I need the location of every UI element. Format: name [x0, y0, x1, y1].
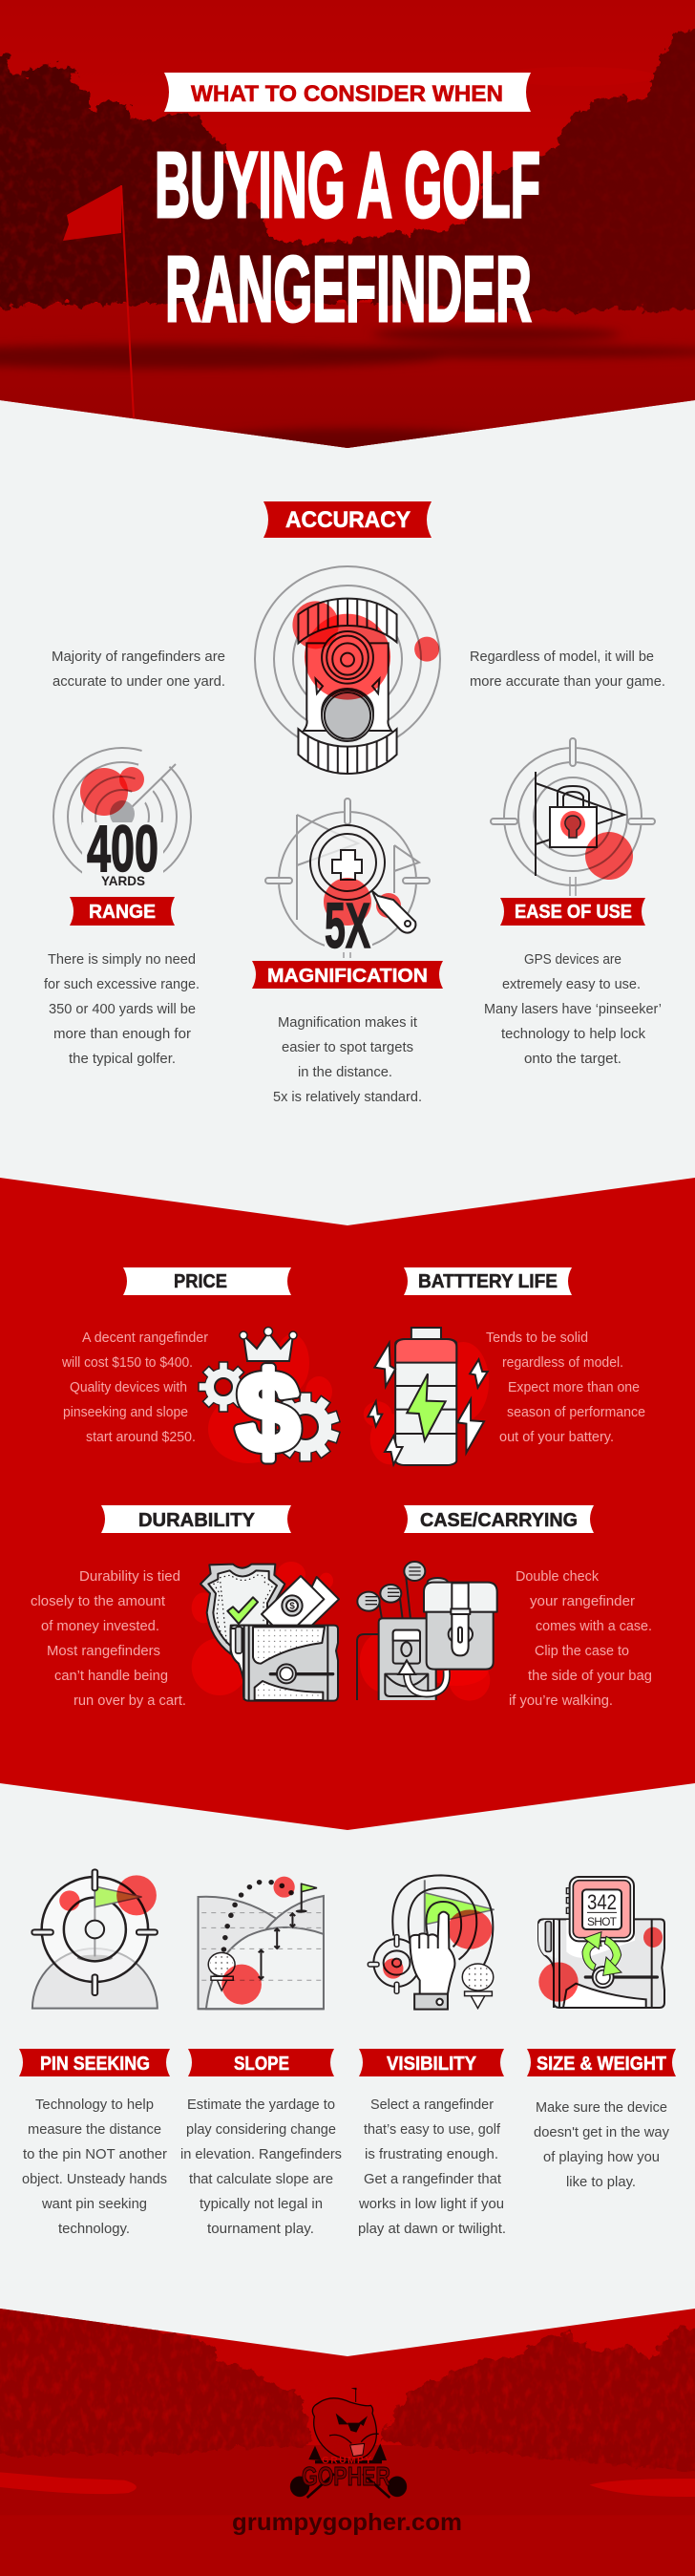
slope heading: SLOPE [234, 2054, 289, 2075]
text: range: for such excessive range. [44, 977, 200, 992]
screen readout: 342 shot [587, 1890, 618, 1928]
icon: durability shield, money, rangefinder [192, 1562, 339, 1701]
ease of use heading [500, 898, 645, 926]
icon: range 400 yards [53, 745, 191, 889]
size and weight heading: SIZE & WEIGHT [537, 2054, 666, 2075]
logo: grumpy gopher: GOPHER [302, 2461, 390, 2491]
text: slope: in elevation. Rangefinders [180, 2147, 342, 2162]
text: battery life [486, 1331, 645, 1445]
magnification heading: MAGNIFICATION [267, 966, 428, 987]
text: ease of use: extremely easy to use. [502, 977, 641, 992]
text: price: will cost $150 to $400. [61, 1355, 193, 1371]
text: battery life: out of your battery. [499, 1430, 614, 1445]
text: visibility [358, 2097, 506, 2237]
text: visibility: play at dawn or twilight. [358, 2222, 506, 2237]
text: accuracy right [470, 649, 665, 690]
text: case/carrying: your rangefinder [530, 1594, 635, 1609]
icon: battery with lightning bolts [364, 1328, 489, 1465]
icon: magnification 5x [265, 798, 430, 962]
case/carrying heading: CASE/CARRYING [420, 1510, 578, 1531]
text: size and weight: like to play. [566, 2175, 636, 2190]
text: magnification: Magnification makes it [278, 1015, 417, 1031]
text: visibility: is frustrating enough. [365, 2147, 498, 2162]
text: range: 350 or 400 yards will be [49, 1002, 196, 1017]
text: magnification: 5x is relatively standard. [273, 1090, 422, 1105]
screen readout: 342 shot: SHOT [587, 1915, 618, 1928]
text: battery life: season of performance [507, 1405, 645, 1420]
text: pin seeking: technology. [58, 2222, 130, 2237]
text: case/carrying [509, 1569, 652, 1709]
logo: grumpy gopher: GRUMPY [322, 2456, 371, 2466]
text: case/carrying: the side of your bag [528, 1669, 652, 1684]
text: size and weight: of playing how you [543, 2150, 660, 2165]
icon: ease of use lock and target [491, 738, 655, 896]
size and weight heading [527, 2049, 676, 2076]
icon: price dollar with crown and gears: $ [237, 1350, 300, 1476]
text: slope: typically not legal in [200, 2197, 323, 2212]
text: ease of use [484, 952, 662, 1067]
text: accuracy right: more accurate than your game. [470, 674, 665, 690]
text: case/carrying: if you’re walking. [509, 1693, 613, 1709]
visibility heading [359, 2049, 504, 2076]
slope heading [188, 2049, 334, 2076]
text: case/carrying: Clip the case to [535, 1644, 629, 1659]
text: durability: closely to the amount [31, 1594, 165, 1609]
icon: range 400 yards: 400 [87, 812, 158, 885]
text: visibility: Get a rangefinder that [364, 2172, 501, 2187]
magnification heading [252, 961, 443, 989]
text: pin seeking: object. Unsteady hands [22, 2172, 167, 2187]
hero subtitle ribbon: WHAT TO CONSIDER WHEN [191, 81, 503, 107]
durability heading [101, 1505, 291, 1533]
text: price: start around $250. [86, 1430, 196, 1445]
hero: golf course photo panel [0, 0, 695, 461]
durability heading: DURABILITY [138, 1510, 256, 1531]
text: ease of use: onto the target. [524, 1052, 621, 1067]
text: slope: tournament play. [207, 2222, 314, 2237]
pin seeking heading: PIN SEEKING [40, 2054, 150, 2075]
text: ease of use: GPS devices are [524, 952, 621, 968]
ease of use heading: EASE OF USE [515, 902, 632, 923]
text: range [44, 952, 200, 1067]
text: durability: of money invested. [41, 1619, 159, 1634]
screen readout: 342 shot: 342 [587, 1890, 617, 1914]
range heading [70, 897, 175, 926]
text: price: Quality devices with [70, 1380, 187, 1395]
text: durability: Durability is tied [79, 1569, 180, 1585]
section: accuracy heading [263, 501, 432, 538]
text: magnification [273, 1015, 422, 1105]
text: accuracy left [52, 649, 225, 690]
text: range: There is simply no need [48, 952, 196, 968]
icon: magnification 5x: 5X [325, 890, 370, 962]
text: durability [31, 1569, 186, 1709]
text: pin seeking: want pin seeking [41, 2197, 147, 2212]
case/carrying heading [404, 1505, 594, 1533]
logo: grumpy gopher [290, 2388, 407, 2498]
icon: case and carrying bag [357, 1562, 497, 1701]
text: pin seeking [22, 2097, 167, 2237]
text: price [61, 1331, 208, 1445]
text: size and weight: doesn't get in the way [534, 2125, 670, 2140]
text: pin seeking: to the pin NOT another [23, 2147, 167, 2162]
text: pin seeking: measure the distance [28, 2122, 161, 2138]
text: slope [180, 2097, 342, 2237]
icon: pin seeking [32, 1869, 158, 2009]
text: slope: play considering change [186, 2122, 336, 2138]
icon: durability shield, money, rangefinder: $ [289, 1601, 295, 1611]
text: magnification: easier to spot targets [282, 1040, 413, 1055]
text: range: more than enough for [53, 1027, 191, 1042]
visibility heading: VISIBILITY [387, 2054, 477, 2075]
icon: slope [199, 1877, 324, 2009]
footer website: grumpygopher.com [232, 2509, 462, 2536]
main title [155, 133, 540, 341]
text: price: pinseeking and slope [63, 1405, 188, 1420]
text: visibility: Select a rangefinder [370, 2097, 494, 2113]
pin seeking heading [19, 2049, 170, 2076]
text: pin seeking: Technology to help [35, 2097, 154, 2113]
text: case/carrying: Double check [516, 1569, 600, 1585]
text: durability: can’t handle being [54, 1669, 168, 1684]
hero subtitle ribbon [164, 73, 531, 112]
text: case/carrying: comes with a case. [536, 1619, 652, 1634]
text: accuracy left: accurate to under one yard. [53, 674, 225, 690]
battery life heading [404, 1267, 572, 1295]
red flag [63, 185, 135, 417]
battery life heading: BATTTERY LIFE [418, 1271, 558, 1292]
text: range: the typical golfer. [69, 1052, 176, 1067]
icon: size and weight [538, 1877, 664, 2008]
price heading: PRICE [174, 1271, 227, 1292]
text: battery life: Expect more than one [508, 1380, 640, 1395]
range heading: RANGE [89, 902, 156, 923]
text: price: A decent rangefinder [82, 1331, 208, 1346]
icon: range 400 yards: YARDS [101, 873, 145, 888]
text: slope: that calculate slope are [189, 2172, 333, 2187]
icon: price dollar with crown and gears [199, 1328, 340, 1476]
icon: price dollar with crown and gears: $ [237, 1350, 300, 1476]
text: accuracy right: Regardless of model, it will be [470, 649, 654, 665]
text: accuracy left: Majority of rangefinders are [52, 649, 225, 665]
text: size and weight [534, 2100, 670, 2190]
text: ease of use: technology to help lock [501, 1027, 646, 1042]
footer: golf course photo panel [0, 2302, 695, 2576]
text: ease of use: Many lasers have ‘pinseeker’ [484, 1002, 662, 1017]
panel: red section [0, 1178, 695, 1830]
icon: accuracy rangefinder and rings [255, 566, 440, 774]
text: size and weight: Make sure the device [536, 2100, 667, 2116]
icon: visibility [368, 1875, 495, 2010]
text: battery life: Tends to be solid [486, 1331, 588, 1346]
text: durability: Most rangefinders [47, 1644, 160, 1659]
text: visibility: that’s easy to use, golf [364, 2122, 501, 2138]
text: visibility: works in low light if you [358, 2197, 504, 2212]
text: battery life: regardless of model. [502, 1355, 623, 1371]
text: slope: Estimate the yardage to [187, 2097, 335, 2113]
text: magnification: in the distance. [298, 1065, 392, 1080]
text: durability: run over by a cart. [74, 1693, 186, 1709]
section: accuracy heading: ACCURACY [285, 507, 411, 533]
price heading [123, 1267, 291, 1295]
